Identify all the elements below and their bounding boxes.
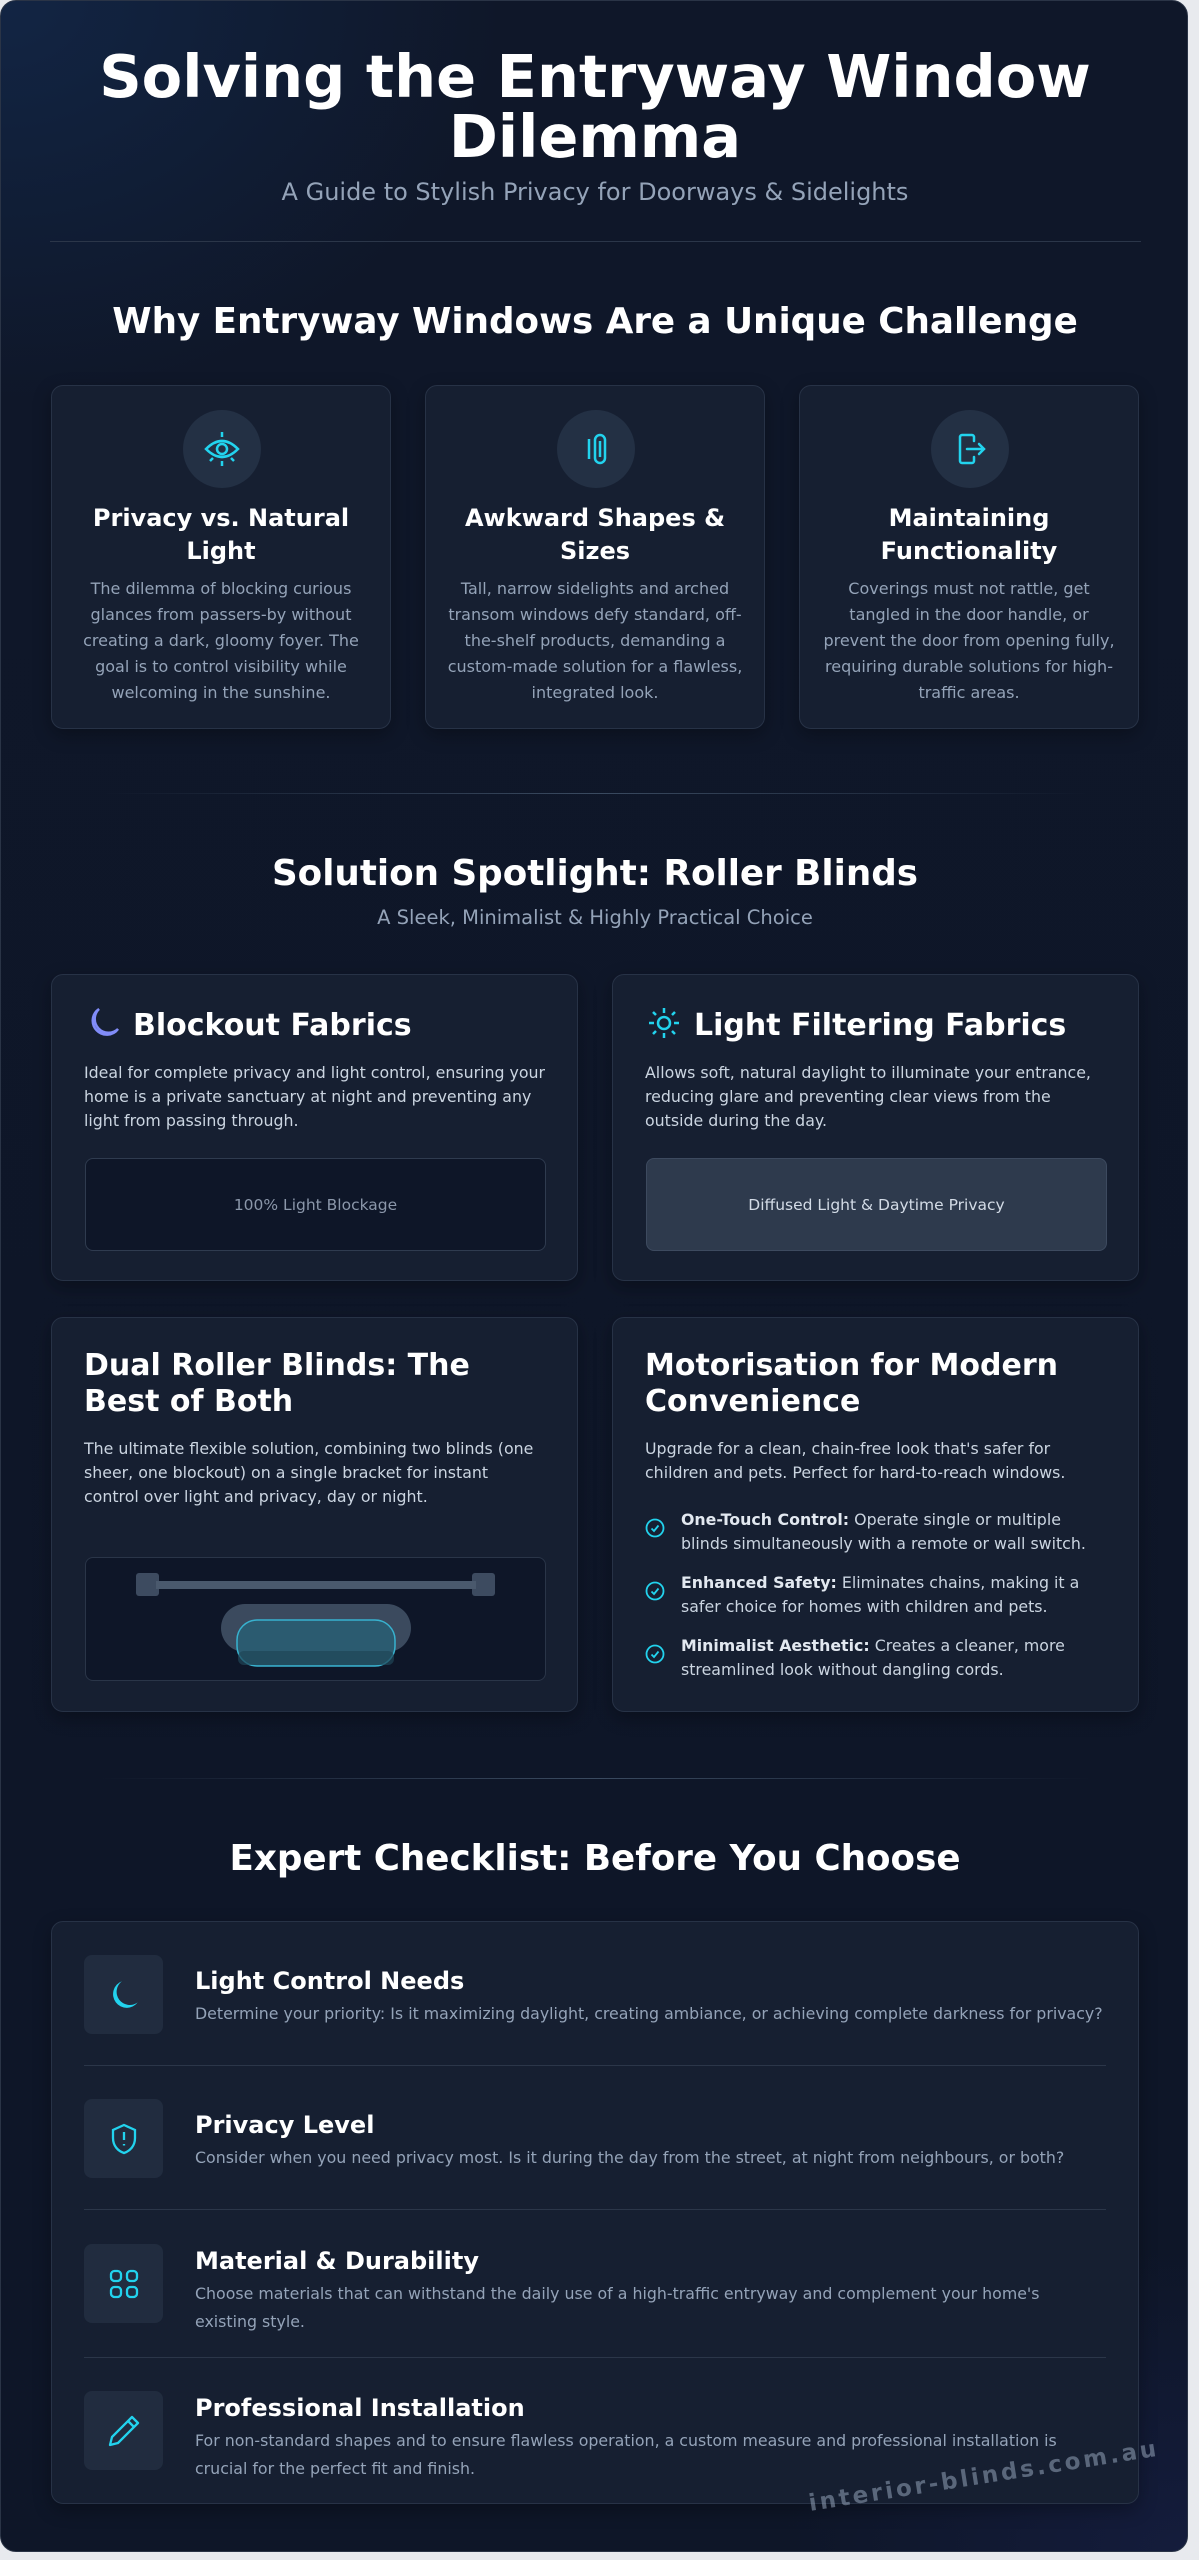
title: Solving the Entryway Window — [99, 42, 1091, 111]
icon: shield — [84, 2099, 163, 2178]
swatch: diffused: Diffused Light & Daytime Privacy — [748, 1196, 1005, 1214]
icon: sidelight — [557, 410, 635, 488]
heading: why unique challenge: Why Entryway Windows Are a Unique Challenge — [112, 301, 1078, 342]
subheading: A Sleek, Minimalist & Highly Practical Choice — [377, 906, 813, 929]
item: installation: Professional Installation — [195, 2394, 525, 2422]
text: Upgrade for a clean, chain-free look that's safer for children and pets. Perfect for hard-to-reach windows. — [645, 1439, 1065, 1482]
swatch: diffused — [646, 1158, 1107, 1251]
card title: Privacy vs. Natural Light — [93, 504, 349, 565]
item: installation — [84, 2391, 1057, 2478]
text: The ultimate flexible solution, combining two blinds (one sheer, one blockout) on a single bracket for instant control over light and privacy, day or night. — [84, 1439, 533, 1506]
panel: functionality — [799, 385, 1139, 729]
title — [99, 42, 1091, 171]
card text: Coverings must not rattle, get tangled in the door handle, or prevent the door from opening fully, requiring durable solutions for high-traffic areas. — [823, 579, 1115, 702]
icon: pencil — [84, 2391, 163, 2470]
bullet: one-touch: One-Touch Control: Operate single or multiple blinds simultaneously with a remote or wall switch. — [681, 1510, 1086, 1553]
item: material: Choose materials that can withstand the daily use of a high-traffic entryway and complement your home's existing style. — [195, 2284, 1040, 2331]
card title: Awkward Shapes & Sizes — [465, 504, 725, 565]
heading with moon icon: Blockout Fabrics — [133, 1008, 412, 1043]
item: light control: Determine your priority: Is it maximizing daylight, creating ambiance, or achieving complete darkness for privacy? — [195, 2004, 1103, 2023]
heading with sun icon: Light Filtering Fabrics — [694, 1008, 1066, 1043]
card title: Maintaining Functionality — [881, 504, 1057, 565]
illustration: dual roller — [85, 1557, 546, 1681]
item: installation: For non-standard shapes and to ensure flawless operation, a custom measure and professional installation is crucial for the perfect fit and finish. — [195, 2431, 1057, 2478]
heading: Dual Roller Blinds: The Best of Both — [84, 1348, 470, 1419]
text: Allows soft, natural daylight to illuminate your entrance, reducing glare and preventing clear views from the outside during the day. — [645, 1063, 1091, 1130]
item: light control: Light Control Needs — [195, 1967, 464, 1995]
item: privacy level — [84, 2099, 1064, 2178]
panel: dual roller blinds — [51, 1317, 578, 1712]
panel: blockout fabrics — [51, 974, 578, 1281]
heading: expert checklist: Expert Checklist: Before You Choose — [229, 1838, 961, 1879]
swatch: blockage — [85, 1158, 546, 1251]
panel: light filtering — [612, 974, 1139, 1281]
bullet: minimalist: Minimalist Aesthetic: Creates a cleaner, more streamlined look without dangling cords. — [681, 1636, 1065, 1679]
heading: solution spotlight: Solution Spotlight: Roller Blinds — [272, 853, 918, 894]
icon: door exit — [931, 410, 1009, 488]
panel: privacy vs natural light — [51, 385, 391, 729]
item: material: Material & Durability — [195, 2247, 479, 2275]
text: Ideal for complete privacy and light control, ensuring your home is a private sanctuary at night and preventing any light from passing through. — [84, 1063, 545, 1130]
panel: awkward shapes — [425, 385, 765, 729]
card text: Tall, narrow sidelights and arched transom windows defy standard, off-the-shelf products, demanding a custom-made solution for a flawless, integrated look. — [448, 579, 742, 702]
icon: grid — [84, 2244, 163, 2323]
panel: checklist — [51, 1921, 1139, 2504]
subtitle: A Guide to Stylish Privacy for Doorways & Sidelights — [282, 178, 908, 206]
panel: motorisation — [612, 1317, 1139, 1712]
item: privacy level: Privacy Level — [195, 2111, 374, 2139]
watermark: interior-blinds.com.au — [807, 2436, 1161, 2517]
swatch: blockage: 100% Light Blockage — [234, 1196, 397, 1214]
card text: The dilemma of blocking curious glances from passers-by without creating a dark, gloomy foyer. The goal is to control visibility while welcoming in the sunshine. — [83, 579, 359, 702]
icon: moon — [84, 1955, 163, 2034]
item: material — [84, 2244, 1040, 2331]
item: privacy level: Consider when you need privacy most. Is it during the day from the street, at night from neighbours, or both? — [195, 2148, 1064, 2167]
heading: Motorisation for Modern Convenience — [645, 1348, 1058, 1419]
title: Dilemma — [449, 102, 741, 171]
bullet: safety: Enhanced Safety: Eliminates chains, making it a safer choice for homes with children and pets. — [681, 1573, 1079, 1616]
icon: eye — [183, 410, 261, 488]
item: light control — [84, 1955, 1103, 2034]
